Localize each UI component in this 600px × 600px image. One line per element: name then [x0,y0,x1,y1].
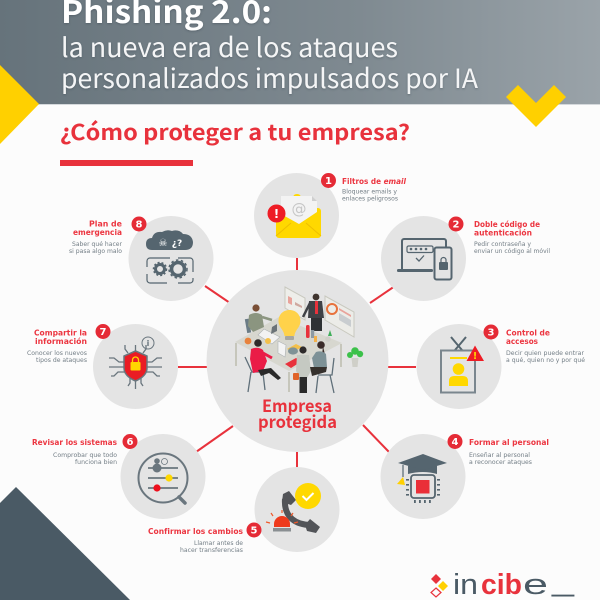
step 2 text [474,219,550,255]
title: personalizados impulsados por IA [61,57,478,96]
badge 3 [484,324,498,340]
step 7 text: información [35,336,87,346]
icon: shield circuit [109,337,162,389]
icon: id badge: ! [473,351,477,362]
badge 6 [122,434,138,449]
step 2 text: autenticación [474,228,532,238]
badge 3: 3 [488,328,495,338]
presenter [303,294,324,331]
logo: incibe: _ [551,566,575,598]
step 3 text [506,328,585,364]
badge 5: 5 [251,526,258,536]
central panel: empresa protegida [206,270,388,452]
step 3 text: accesos [506,337,538,346]
icon: envelope: @ [292,200,306,218]
subtitle: ¿Cómo proteger a tu empresa? [60,116,410,147]
title [61,0,478,96]
icon: cloud and gears: ¿? [172,239,182,249]
step 4 text [469,438,549,466]
step 1: filtros de email [254,173,406,258]
step 8 text: emergencia [73,228,122,237]
yellow chevron [506,85,566,127]
standing person [293,346,311,393]
step 7 text: Compartir la [34,328,87,338]
badge 2 [448,216,464,232]
badge 6: 6 [127,437,134,448]
icon: envelope [268,194,321,238]
step 1 text: Filtros de email [342,177,406,186]
step 6 text: Revisar los sistemas [32,438,117,447]
badge 8 [132,216,146,232]
yellow triangle [0,65,39,144]
step 8: plan de emergencia [69,216,214,301]
badge 7 [96,324,110,339]
icon: phone and siren [266,483,321,533]
step 6 text [32,438,117,466]
badge 1: 1 [325,176,332,187]
step 3 text: Control de [506,328,551,338]
step 7 text: Conocer los nuevos [27,350,87,357]
title: la nueva era de los ataques [61,26,398,65]
team illustration [235,287,363,393]
step 3: control de accesos [416,324,585,409]
logo: incibe [431,566,575,600]
step 2 text: enviar un código al móvil [474,248,550,255]
icon: id badge [441,337,484,392]
step 6: revisar los sistemas [32,434,206,519]
badge 4 [448,434,462,449]
plant [347,347,363,367]
step 5 text: hacer transferencias [180,547,243,554]
step 4: formar al personal [380,434,549,519]
step 4 text: a reconocer ataques [469,459,532,466]
lightbulb [278,310,300,340]
seated person green [245,304,272,333]
step 6 text: funciona bien [75,459,117,466]
icon: cloud and gears: ☠ [159,238,168,249]
step 5: confirmar los cambios [148,467,340,554]
step 8 text: si pasa algo malo [69,248,122,255]
step 5 text: Confirmar los cambios [148,527,243,536]
step 7 text [27,328,87,364]
step 5 text: Llamar antes de [194,540,243,547]
icon: cloud and gears [146,230,193,283]
step 1 text [342,177,406,202]
header band [0,0,600,105]
step 8 text: Plan de [89,220,123,228]
central label: Empresa [262,393,332,417]
badge 4: 4 [452,437,459,448]
step 3 text: Decir quien puede entrar [506,350,585,357]
step 8 text [69,220,123,255]
step 3 text: a qué, quien no y por qué [506,357,585,364]
icon: shield circuit: i [147,339,150,348]
central label: protegida [258,409,337,433]
step 7 text: tipos de ataques [36,357,87,364]
step 7: compartir la informacion [27,324,178,409]
central label [258,393,337,433]
badge 8: 8 [136,220,143,230]
subtitle underline [60,160,193,166]
step 2 text: Pedir contraseña y [474,241,531,248]
step 1 text: Bloquear emails y [342,188,397,196]
badge 1 [321,173,336,188]
step 5 text [148,527,243,554]
step 8 text: Saber qué hacer [72,241,123,248]
badge 5 [246,522,262,538]
badge 2: 2 [453,220,460,230]
step 2 text: Doble código de [474,219,541,229]
step 6 text: Comprobar que todo [53,452,117,459]
connector lines [178,258,416,467]
icon: graduation cap chip [397,454,447,503]
laptops and desk objects [245,324,332,368]
step 2: doble codigo [381,216,550,301]
icon: envelope: ! [274,207,279,221]
seated person teal [310,341,334,393]
step 4 text: Enseñar al personal [469,452,530,459]
bottom-left dark triangle [0,487,130,600]
step 4 text: Formar al personal [469,438,549,447]
badge 7: 7 [100,327,107,338]
icon: magnifier sliders [138,454,188,503]
seated person red [245,339,281,392]
step 1 text: enlaces peligrosos [342,196,398,202]
icon: laptop and phone [397,239,452,280]
